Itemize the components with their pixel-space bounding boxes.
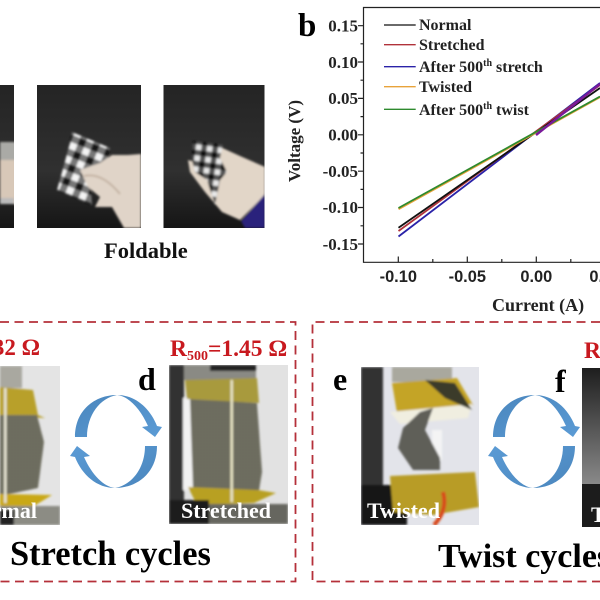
resistance label after 500 stretches: R: [170, 336, 187, 362]
photo: normal state: [0, 366, 60, 525]
heading: Stretch cycles: Stretch cycles: [10, 535, 211, 573]
y axis tick labels: 0.00: [328, 126, 358, 144]
photo: foldable sample, hand folding fabric: [37, 85, 141, 228]
icon: cycle arrows: [488, 395, 580, 488]
y axis tick labels: 0.05: [328, 89, 358, 108]
panel letter b: b: [298, 8, 316, 44]
photo: foldable sample, cropped left: [0, 85, 14, 228]
photo: foldable sample, fabric crumpled in glove: [164, 85, 264, 228]
chart legend: stretch: [492, 59, 543, 76]
x axis tick labels: -0.10: [380, 268, 417, 286]
panel letter e: e: [333, 361, 347, 397]
y axis tick labels: -0.15: [323, 235, 358, 254]
photo: stretched state: Stretched: [181, 498, 271, 523]
photo: twisted state: [361, 367, 479, 525]
y axis tick labels: 0.15: [328, 16, 358, 36]
resistance label after 500 stretches: 500: [187, 349, 208, 364]
photo: stretched state: [169, 365, 288, 524]
panel: twist cycles: [312, 322, 600, 582]
photo: twisted state: Twisted: [367, 498, 440, 523]
icon: cycle arrows: [70, 395, 162, 488]
resistance label after 500 stretches: =1.45 Ω: [208, 336, 287, 362]
photo: twist return state, cropped right: [582, 368, 600, 527]
chart legend: [384, 17, 543, 119]
data lines: [398, 83, 600, 236]
chart legend: twist: [492, 102, 530, 119]
y axis tick labels: [323, 16, 358, 254]
panel letter f: f: [555, 363, 566, 399]
panel letter d: d: [138, 361, 156, 397]
chart legend: After 500: [419, 59, 483, 76]
chart: current-voltage curves: [285, 8, 600, 316]
dashed border: [312, 322, 600, 582]
chart legend: Stretched: [419, 37, 485, 54]
chart axes: [358, 8, 600, 262]
dashed border: [0, 322, 296, 582]
x axis title: Current (A): [492, 295, 584, 316]
caption: Foldable: Foldable: [104, 238, 188, 263]
y axis tick labels: -0.05: [323, 162, 358, 181]
chart legend: Normal: [419, 17, 472, 34]
y axis tick labels: 0.10: [328, 53, 358, 72]
chart legend: th: [483, 58, 492, 69]
panel: stretch cycles: [0, 322, 296, 582]
chart legend: After 500: [419, 102, 483, 119]
x axis tick labels: [380, 268, 600, 286]
y axis tick labels: -0.10: [323, 198, 358, 217]
chart legend: th: [483, 101, 492, 112]
y axis title: Voltage (V): [285, 100, 304, 182]
chart legend: Twisted: [419, 79, 472, 96]
x axis tick labels: 0.00: [520, 268, 552, 286]
x axis tick labels: -0.05: [449, 268, 486, 286]
